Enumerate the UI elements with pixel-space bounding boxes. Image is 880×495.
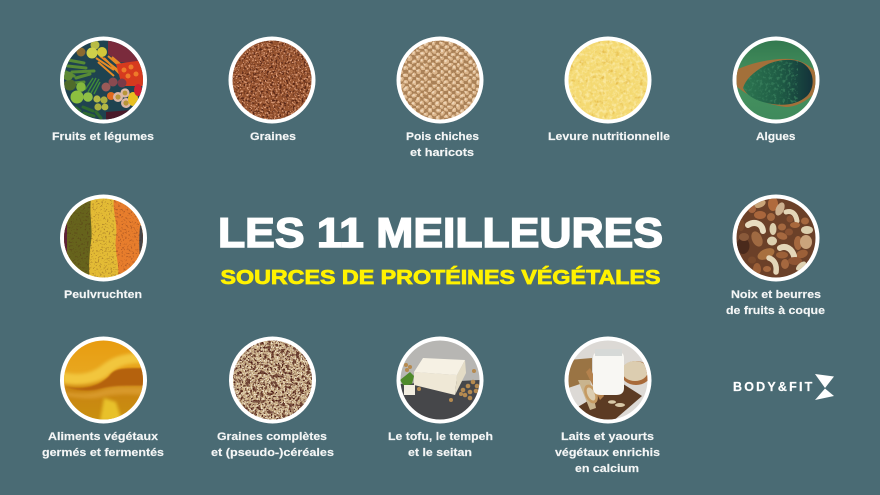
item: levure nutritionnelle (564, 36, 652, 124)
item: graines (228, 36, 316, 124)
logo: Body&Fit (733, 374, 834, 400)
item: tofu (396, 336, 484, 424)
title: LES 11 MEILLEURES (218, 209, 663, 256)
logo: Body&Fit: BODY&FIT (733, 380, 814, 394)
icon: logo mark (815, 374, 834, 400)
label: laits et yaourts végétaux enrichis en calcium: en calcium (575, 463, 639, 475)
label: peulvruchten: Peulvruchten (64, 289, 142, 301)
label: laits et yaourts végétaux enrichis en calcium: végétaux enrichis (555, 447, 660, 459)
label: pois chiches et haricots: et haricots (410, 147, 474, 159)
label: graines: Graines (250, 131, 296, 143)
photo: fruits and vegetables (63, 40, 144, 121)
photo: plant milk and oats (568, 340, 651, 422)
item: fruits et légumes (60, 36, 147, 124)
label: noix et beurres: Noix et beurres (731, 289, 821, 301)
label: noix et beurres: de fruits à coque (726, 305, 825, 317)
photo: tofu block (400, 340, 480, 421)
item: aliments germés (60, 336, 147, 424)
label: graines complètes et pseudo-céréales: et (pseudo-)céréales (211, 447, 334, 459)
item: pois chiches et haricots (396, 36, 484, 124)
photo: stripes of pulses (63, 198, 144, 279)
item: algues (732, 36, 820, 124)
label: le tofu, le tempeh et le seitan (388, 431, 493, 459)
label: le tofu, le tempeh et le seitan: Le tofu, le tempeh (388, 431, 493, 443)
label: graines complètes et pseudo-céréales (211, 431, 334, 459)
label: laits et yaourts végétaux enrichis en calcium: Laits et yaourts (561, 431, 654, 443)
label: aliments végétaux germés et fermentés (42, 431, 164, 459)
label: aliments végétaux germés et fermentés: Aliments végétaux (48, 431, 159, 443)
label: fruits et légumes: Fruits et légumes (52, 131, 154, 143)
label: algues: Algues (756, 131, 796, 143)
label: pois chiches et haricots (406, 131, 479, 159)
label: laits et yaourts végétaux enrichis en calcium (555, 431, 660, 475)
item: laits et yaourts (564, 336, 652, 424)
label: aliments végétaux germés et fermentés: germés et fermentés (42, 447, 164, 459)
item: graines complètes (229, 336, 316, 424)
item: noix et beurres (732, 194, 820, 282)
photo: nutritional yeast (568, 40, 648, 120)
photo: flax seeds (232, 40, 312, 120)
label: noix et beurres (726, 289, 825, 317)
photo: fermented food (63, 340, 144, 421)
photo: quinoa (232, 340, 313, 421)
label: pois chiches et haricots: Pois chiches (406, 131, 479, 143)
label: le tofu, le tempeh et le seitan: et le seitan (408, 447, 472, 459)
label: graines complètes et pseudo-céréales: Graines complètes (217, 431, 327, 443)
item: peulvruchten (60, 194, 147, 282)
photo: mixed nuts (736, 197, 816, 278)
photo: spirulina on a spoon (736, 40, 816, 120)
photo: chickpeas (400, 40, 480, 120)
label: levure nutritionnelle: Levure nutritionnelle (548, 131, 670, 143)
subtitle: SOURCES DE PROTÉINES VÉGÉTALES (220, 266, 660, 289)
